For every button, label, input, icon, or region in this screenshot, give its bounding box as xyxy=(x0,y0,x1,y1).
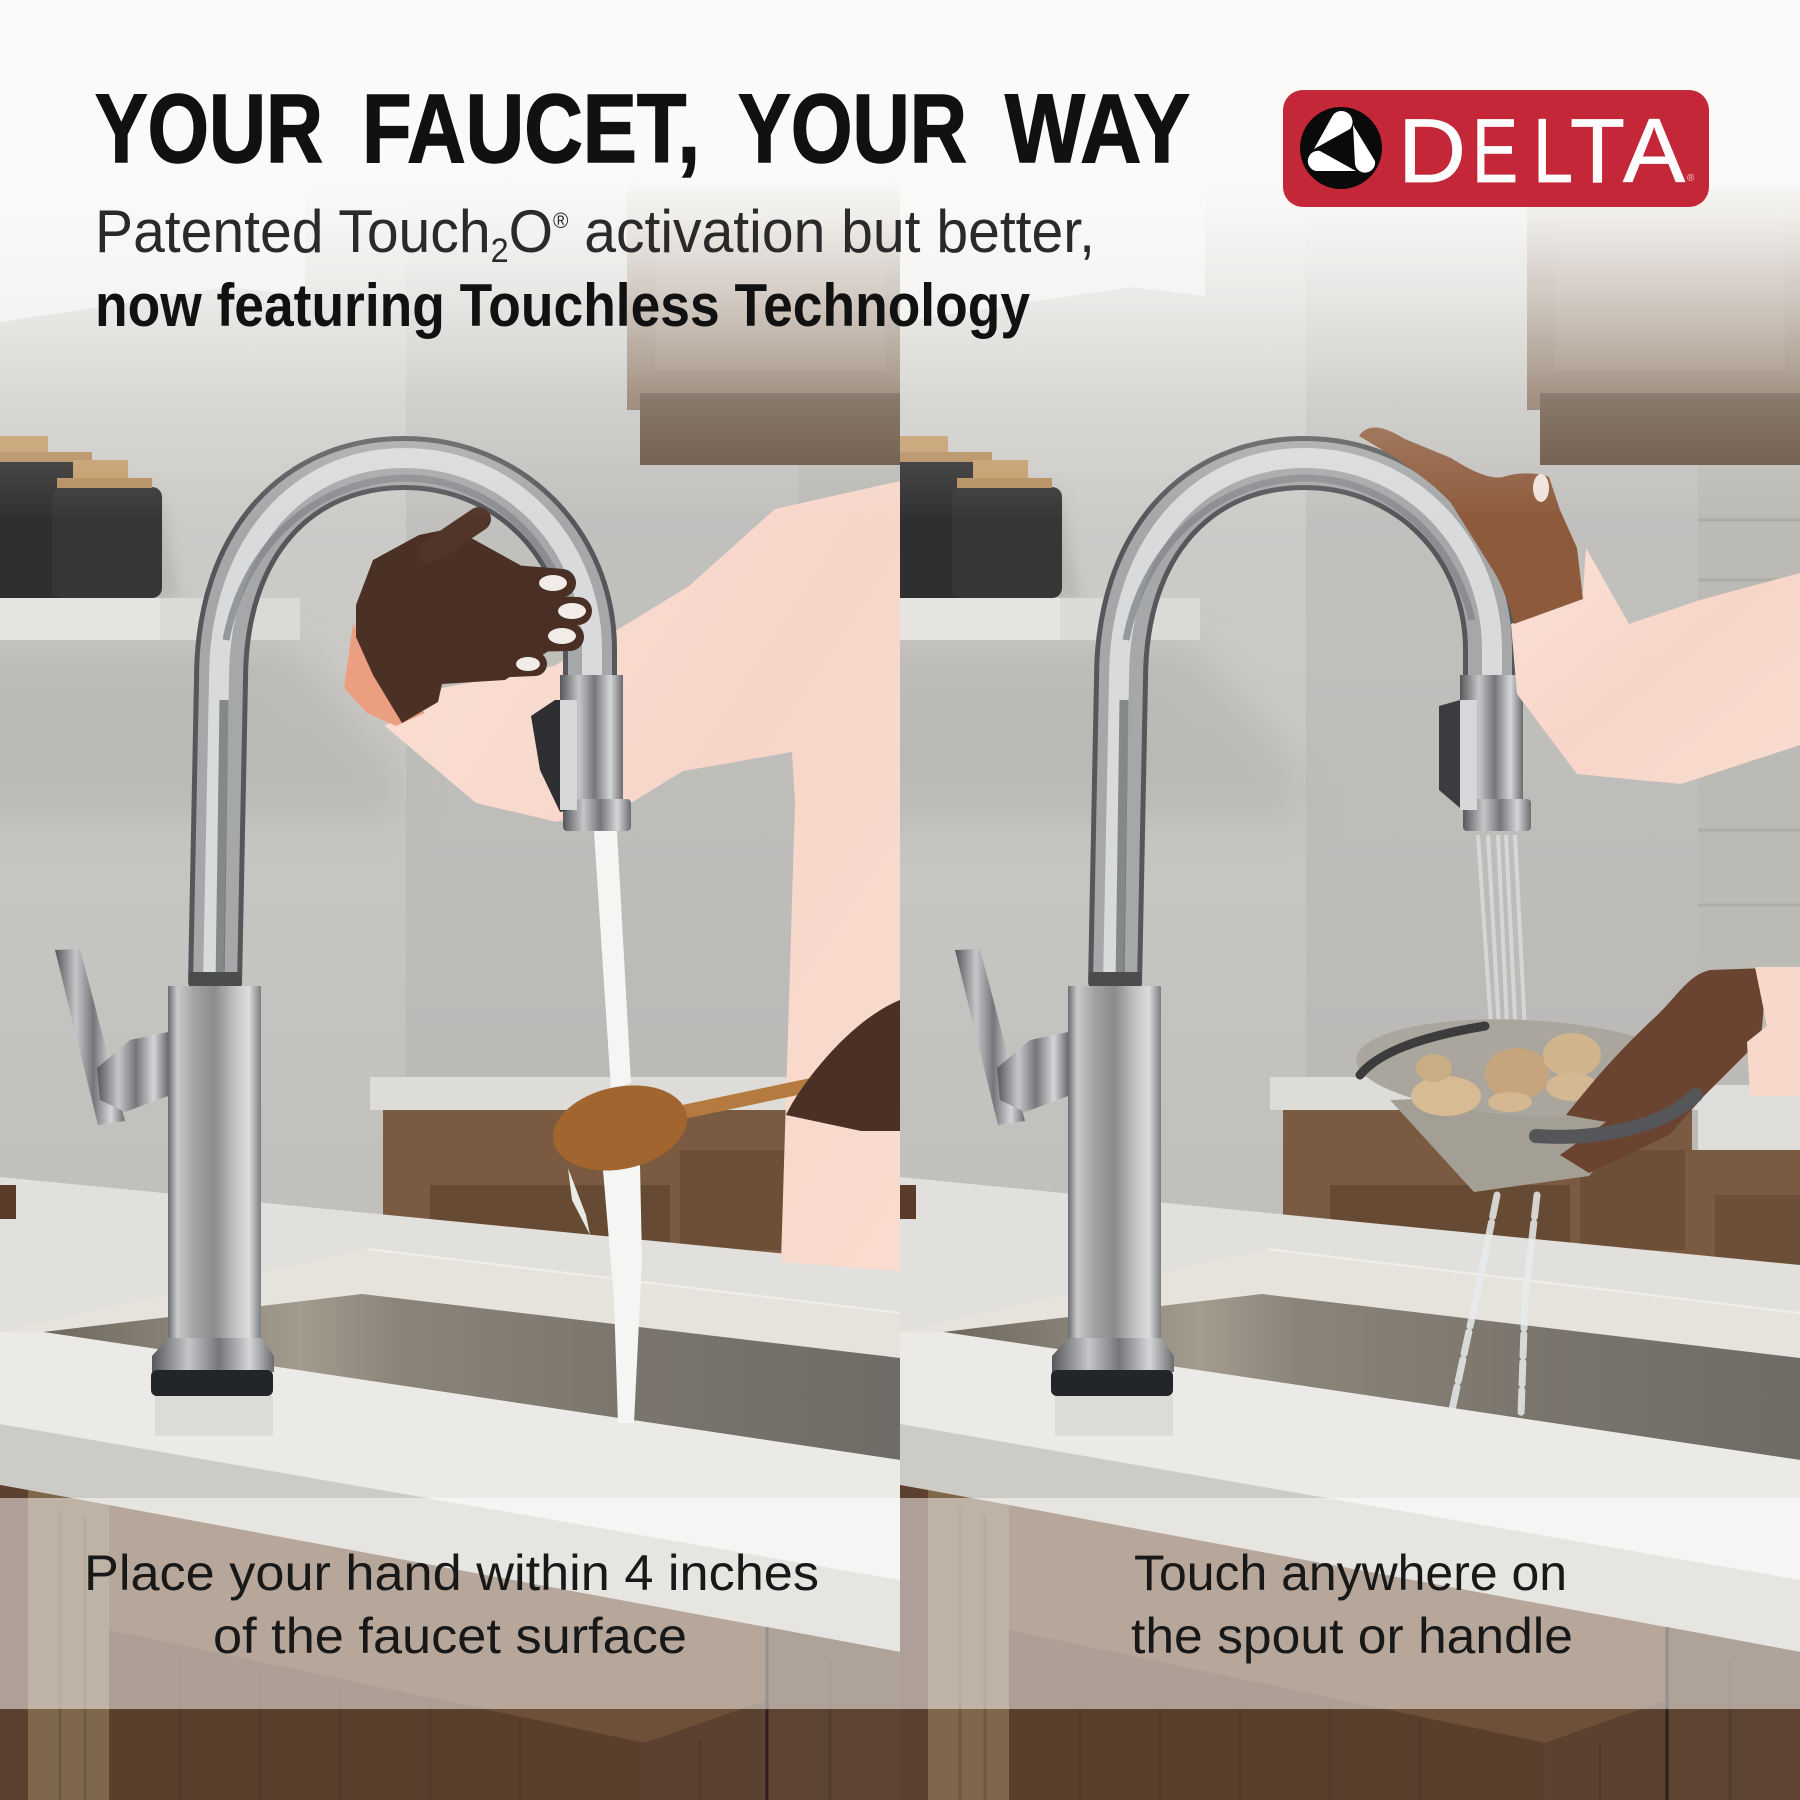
caption: right xyxy=(1131,1545,1573,1664)
hand holding spoon xyxy=(786,1000,900,1131)
logo wordmark: T xyxy=(1570,101,1625,202)
spray head button xyxy=(1439,700,1477,810)
cuff opening xyxy=(344,624,425,726)
faucet xyxy=(55,458,631,1396)
right caption line one: Touch anywhere on xyxy=(1134,1545,1567,1601)
top fade overlay xyxy=(0,0,1800,520)
subtitle line one: ® xyxy=(553,208,568,233)
strainer handle xyxy=(1536,1095,1696,1137)
strainer with mushrooms xyxy=(1354,1011,1698,1192)
subtitle xyxy=(95,198,1095,339)
right caption line two: the spout or handle xyxy=(1131,1608,1573,1664)
water stream xyxy=(594,831,642,1423)
caption band xyxy=(0,1498,1800,1709)
title word: YOUR xyxy=(95,74,323,183)
title word: WAY xyxy=(1005,74,1190,183)
cuff xyxy=(1747,967,1800,1096)
subtitle line two: now featuring Touchless Technology xyxy=(95,272,1031,339)
logo wordmark xyxy=(1398,101,1685,202)
spray water xyxy=(1478,835,1525,1045)
title xyxy=(95,74,1190,183)
left caption line two: of the faucet surface xyxy=(213,1608,687,1664)
hand touching spout xyxy=(1359,428,1583,624)
subtitle line one: Patented Touch xyxy=(95,198,511,265)
logo wordmark: E xyxy=(1472,101,1518,202)
spray head button xyxy=(531,700,577,812)
shirt and sleeve xyxy=(385,481,900,1271)
Delta logo xyxy=(1283,90,1709,207)
logo wordmark: A xyxy=(1623,101,1685,202)
water drips xyxy=(1452,1195,1537,1415)
subtitle line one: 2 xyxy=(491,232,509,270)
logo wordmark: L xyxy=(1533,101,1573,202)
logo wordmark: D xyxy=(1398,101,1466,202)
panel: right kitchen scene with hand touching faucet xyxy=(840,0,1800,1800)
water splashes xyxy=(568,1168,590,1235)
panel: left kitchen scene with hand hovering near faucet xyxy=(0,0,900,1800)
wooden spoon xyxy=(545,1074,821,1182)
title word: YOUR xyxy=(738,74,967,183)
sleeve xyxy=(1511,548,1800,784)
title word: FAUCET, xyxy=(362,74,700,183)
hand near spout xyxy=(356,519,586,723)
subtitle line one: activation but better, xyxy=(568,198,1095,265)
hand holding strainer xyxy=(1560,968,1767,1173)
icon: Delta emblem xyxy=(1300,107,1382,189)
subtitle line one: O xyxy=(509,198,553,265)
caption: left xyxy=(84,1545,819,1664)
faucet xyxy=(955,458,1531,1396)
registered mark: ® xyxy=(1687,173,1695,184)
left caption line one: Place your hand within 4 inches xyxy=(84,1545,819,1601)
